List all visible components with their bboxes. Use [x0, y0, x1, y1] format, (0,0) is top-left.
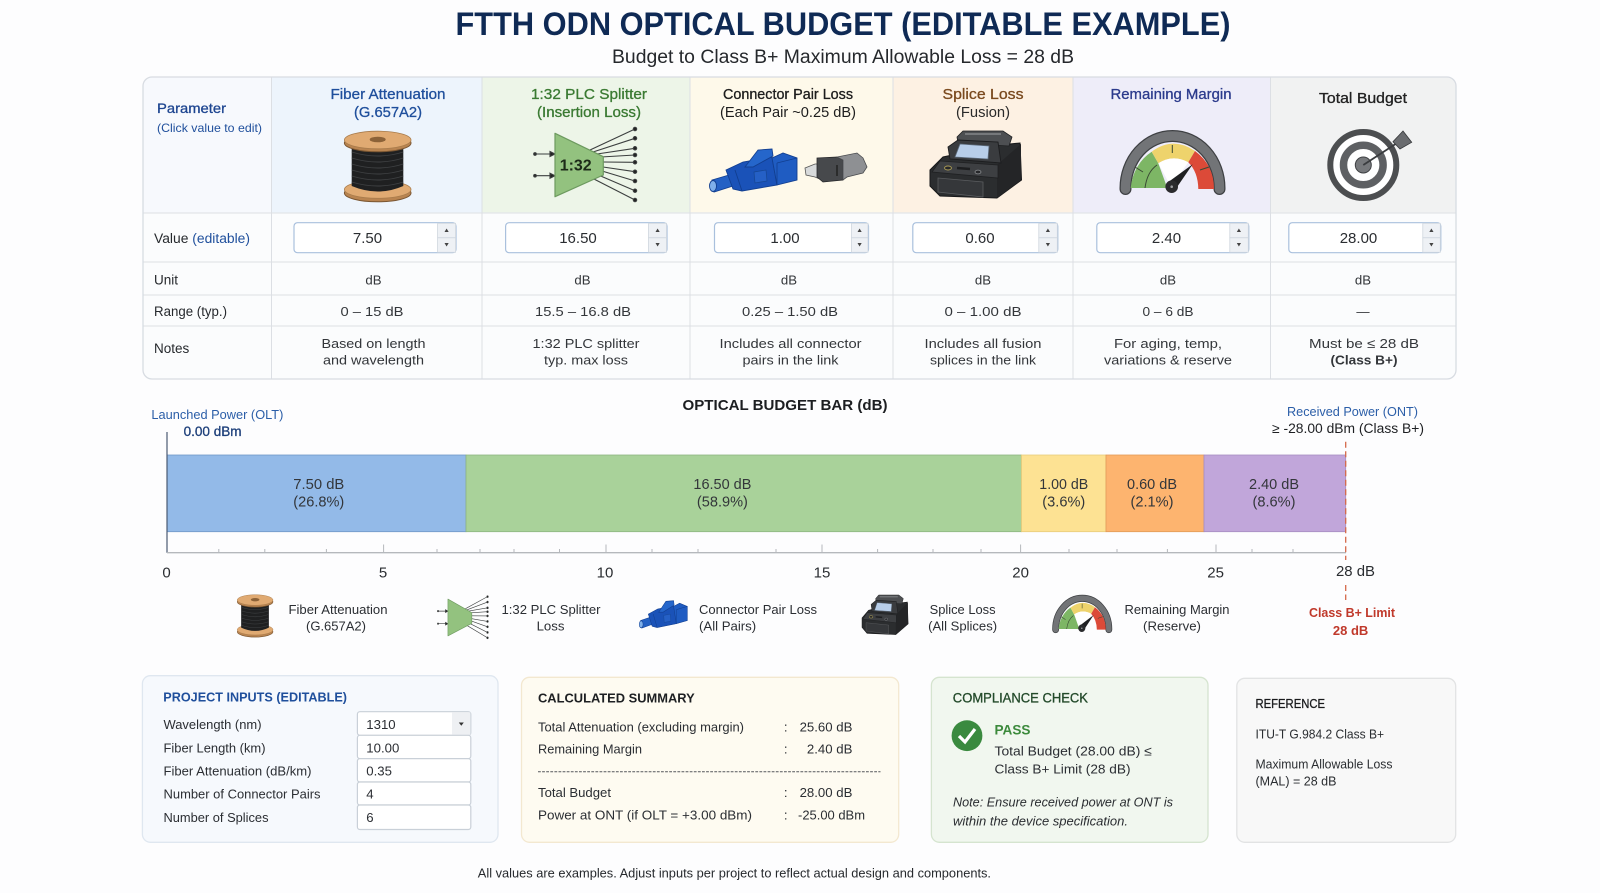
summary rows: :: [784, 720, 788, 735]
summary rows: Total Budget: [538, 785, 611, 800]
input labels: Wavelength (nm): [164, 717, 262, 732]
icon: 1:32 splitter: 1:32: [560, 158, 592, 175]
input labels: Fiber Length (km): [164, 740, 266, 755]
notes row: For aging, temp,: [1114, 336, 1222, 351]
parameter heading: Parameter: [157, 100, 226, 116]
input: splice value: 0.60: [965, 230, 995, 247]
segment: splitter: 16.50 dB: [693, 477, 751, 493]
range row: [340, 304, 1370, 319]
legend: fiber attenuation: Fiber Attenuation: [288, 602, 388, 617]
range row: 15.5 – 16.8 dB: [535, 304, 631, 319]
summary rows: Total Attenuation (excluding margin): [538, 720, 744, 735]
heading: splice loss: [942, 87, 1024, 121]
parameter heading: [157, 100, 262, 135]
summary rows: 28.00 dB: [800, 785, 853, 800]
segment: margin: 2.40 dB: [1249, 477, 1299, 493]
heading: connector pair loss: (Each Pair ~0.25 dB): [720, 105, 856, 121]
axis with ticks: 10: [597, 564, 613, 581]
summary rows: :: [784, 808, 788, 823]
label: received power: Received Power (ONT): [1287, 404, 1418, 419]
input fields: [357, 712, 471, 830]
legend: connector: (All Pairs): [699, 619, 756, 634]
legend: margin: (Reserve): [1143, 619, 1201, 634]
segment: splice: 0.60 dB: [1127, 477, 1177, 493]
icon: fiber spool: [344, 131, 411, 202]
heading: fiber attenuation: (G.657A2): [354, 105, 422, 121]
segment: splitter: [466, 455, 1022, 532]
footer note: All values are examples. Adjust inputs per project to reflect actual design and components.: [478, 866, 991, 880]
notes row: Must be ≤ 28 dB: [1309, 336, 1419, 351]
segment: connector: 1.00 dB: [1039, 477, 1088, 493]
compliance note: [953, 795, 1173, 829]
range row: —: [1356, 304, 1370, 319]
axis with ticks: 15: [814, 564, 830, 581]
icon: fusion splicer: [930, 131, 1022, 198]
label: received power: [1272, 404, 1424, 436]
axis with ticks: 0: [162, 564, 171, 581]
notes row: [322, 336, 1419, 368]
label: class B+ limit: 28 dB: [1333, 623, 1368, 638]
input labels: Number of Connector Pairs: [164, 786, 321, 802]
input: connector value: [714, 223, 868, 253]
compliance note: Note: Ensure received power at ONT is: [953, 795, 1173, 810]
segment: splitter: (58.9%): [697, 495, 748, 511]
notes row: Includes all fusion: [924, 336, 1042, 351]
range row: 0 – 6 dB: [1142, 304, 1194, 319]
label: class B+ limit: [1309, 605, 1396, 638]
input fields: 1310: [366, 717, 396, 732]
input: splitter value: [506, 223, 667, 253]
label: received power: ≥ -28.00 dBm (Class B+): [1272, 421, 1424, 436]
icon: 1:32 splitter: [534, 127, 637, 202]
row labels: [154, 231, 250, 356]
segment: splice: [1106, 455, 1204, 532]
summary rows: :: [784, 741, 788, 756]
row labels: Value (editable): [154, 231, 250, 246]
input labels: Fiber Attenuation (dB/km): [164, 764, 312, 779]
reference text: ITU-T G.984.2 Class B+: [1256, 727, 1384, 741]
segment: margin: (8.6%): [1252, 495, 1296, 511]
input fields: 6: [366, 810, 374, 825]
summary rows: Remaining Margin: [538, 741, 642, 756]
unit row: dB: [365, 273, 382, 288]
label: launched power: Launched Power (OLT): [151, 407, 283, 422]
icon: connectors: [710, 149, 867, 192]
label: class B+ limit: Class B+ Limit: [1309, 605, 1396, 620]
axis with ticks: [162, 432, 1375, 581]
legend: margin: [1056, 598, 1230, 634]
input labels: [164, 717, 321, 825]
heading: project inputs: PROJECT INPUTS (EDITABLE): [163, 690, 347, 705]
legend: fiber attenuation: [237, 595, 388, 637]
input: fiber value: [294, 223, 456, 253]
segment: fiber attenuation: (26.8%): [293, 495, 344, 511]
heading: splitter: [531, 87, 647, 121]
heading: splice loss: (Fusion): [956, 105, 1010, 121]
panel: project inputs: [142, 676, 498, 842]
subtitle: Budget to Class B+ Maximum Allowable Loss = 28 dB: [612, 47, 1074, 68]
segment: connector: (3.6%): [1042, 495, 1085, 511]
summary rows: Power at ONT (if OLT = +3.00 dBm): [538, 808, 752, 823]
pass status: Class B+ Limit (28 dB): [994, 762, 1130, 777]
reference text: (MAL) = 28 dB: [1256, 775, 1336, 789]
input: margin value: [1097, 223, 1249, 253]
pass status: Total Budget (28.00 dB) ≤: [994, 744, 1152, 759]
input: fiber value: 7.50: [353, 230, 382, 247]
legend: fiber attenuation: (G.657A2): [306, 619, 366, 634]
axis with ticks: 5: [379, 564, 387, 581]
panel: compliance check: [931, 677, 1208, 842]
input: total value: 28.00: [1340, 230, 1377, 247]
panel: budget table: [143, 77, 1456, 379]
heading: total budget: Total Budget: [1319, 91, 1407, 107]
row labels: Notes: [154, 341, 190, 356]
stacked bar chart: [167, 455, 1346, 532]
notes row: variations & reserve: [1104, 353, 1232, 368]
legend: splice: Splice Loss: [930, 602, 996, 617]
axis with ticks: 20: [1012, 564, 1029, 581]
notes row: and wavelength: [323, 353, 424, 368]
row labels: Unit: [154, 273, 178, 288]
notes row: typ. max loss: [544, 353, 628, 368]
input fields: 4: [366, 786, 374, 802]
row labels: Range (typ.): [154, 304, 227, 319]
legend: margin: Remaining Margin: [1124, 602, 1230, 617]
notes row: 1:32 PLC splitter: [532, 336, 640, 351]
unit row: dB: [1160, 273, 1176, 288]
title: FTTH ODN OPTICAL BUDGET (EDITABLE EXAMPLE): [456, 6, 1230, 42]
summary rows: 25.60 dB: [800, 720, 853, 735]
legend: splice: [862, 595, 997, 635]
pass status: PASS: [994, 721, 1030, 737]
axis with ticks: 28 dB: [1336, 563, 1375, 580]
unit row: dB: [1355, 273, 1371, 288]
pass status: [994, 721, 1152, 777]
heading: splice loss: Splice Loss: [942, 87, 1024, 103]
unit row: dB: [574, 273, 591, 288]
segment: splice: (2.1%): [1130, 495, 1174, 511]
reference text: [1256, 727, 1392, 789]
legend: connector: Connector Pair Loss: [699, 602, 817, 617]
heading: remaining margin: Remaining Margin: [1110, 87, 1232, 103]
heading: calculated summary: CALCULATED SUMMARY: [538, 690, 695, 705]
input: margin value: 2.40: [1152, 230, 1181, 247]
input: splice value: [913, 223, 1058, 253]
summary rows: [538, 720, 880, 823]
icon: gauge: [1126, 136, 1220, 193]
segment: margin: [1204, 455, 1346, 532]
heading: reference: REFERENCE: [1256, 697, 1325, 711]
icon: target: [1330, 131, 1412, 198]
reference text: Maximum Allowable Loss: [1256, 757, 1392, 771]
table header backgrounds: [143, 77, 1456, 379]
notes row: pairs in the link: [742, 353, 839, 368]
heading: splitter: (Insertion Loss): [537, 105, 641, 121]
unit row: dB: [781, 273, 797, 288]
range row: 0 – 1.00 dB: [944, 304, 1022, 319]
notes row: (Class B+): [1330, 353, 1398, 368]
notes row: splices in the link: [930, 353, 1036, 368]
range row: 0 – 15 dB: [340, 304, 404, 319]
input: total value: [1289, 223, 1441, 253]
heading: splitter: 1:32 PLC Splitter: [531, 87, 647, 103]
heading: compliance check: COMPLIANCE CHECK: [953, 690, 1088, 705]
legend: splice: (All Splices): [928, 619, 997, 634]
legend: splitter: [437, 596, 601, 639]
heading: connector pair loss: [720, 87, 856, 121]
label: launched power: 0.00 dBm: [184, 423, 242, 439]
heading: fiber attenuation: Fiber Attenuation: [330, 87, 446, 103]
icon: pass check: [952, 720, 982, 751]
input fields: 10.00: [366, 740, 399, 755]
input: connector value: 1.00: [770, 230, 800, 247]
legend: connector: [639, 601, 817, 634]
legend: splitter: 1:32 PLC Splitter: [502, 602, 601, 617]
compliance note: within the device specification.: [953, 814, 1128, 829]
panel: calculated summary: [522, 677, 899, 842]
notes row: Based on length: [322, 336, 426, 351]
notes row: Includes all connector: [720, 336, 862, 351]
segment: fiber attenuation: [167, 455, 466, 532]
segment: connector: [1022, 455, 1106, 532]
label: launched power: [151, 407, 283, 439]
unit row: dB: [975, 273, 991, 288]
heading: fiber attenuation: [330, 87, 446, 121]
summary rows: :: [784, 785, 788, 800]
summary rows: -25.00 dBm: [798, 808, 865, 823]
unit row: [365, 273, 1371, 288]
heading: connector pair loss: Connector Pair Loss: [723, 87, 853, 103]
input: splitter value: 16.50: [559, 230, 597, 247]
axis with ticks: 25: [1207, 564, 1224, 581]
range row: 0.25 – 1.50 dB: [742, 304, 838, 319]
summary rows: 2.40 dB: [807, 741, 853, 756]
legend: splitter: Loss: [537, 619, 565, 634]
parameter heading: (Click value to edit): [157, 121, 262, 135]
heading: optical budget bar: OPTICAL BUDGET BAR (dB): [682, 397, 888, 414]
input fields: 0.35: [366, 764, 392, 779]
panel: reference: [1237, 678, 1456, 842]
input labels: Number of Splices: [164, 810, 269, 825]
class B+ limit line: [1345, 442, 1347, 600]
segment: fiber attenuation: 7.50 dB: [293, 477, 344, 493]
